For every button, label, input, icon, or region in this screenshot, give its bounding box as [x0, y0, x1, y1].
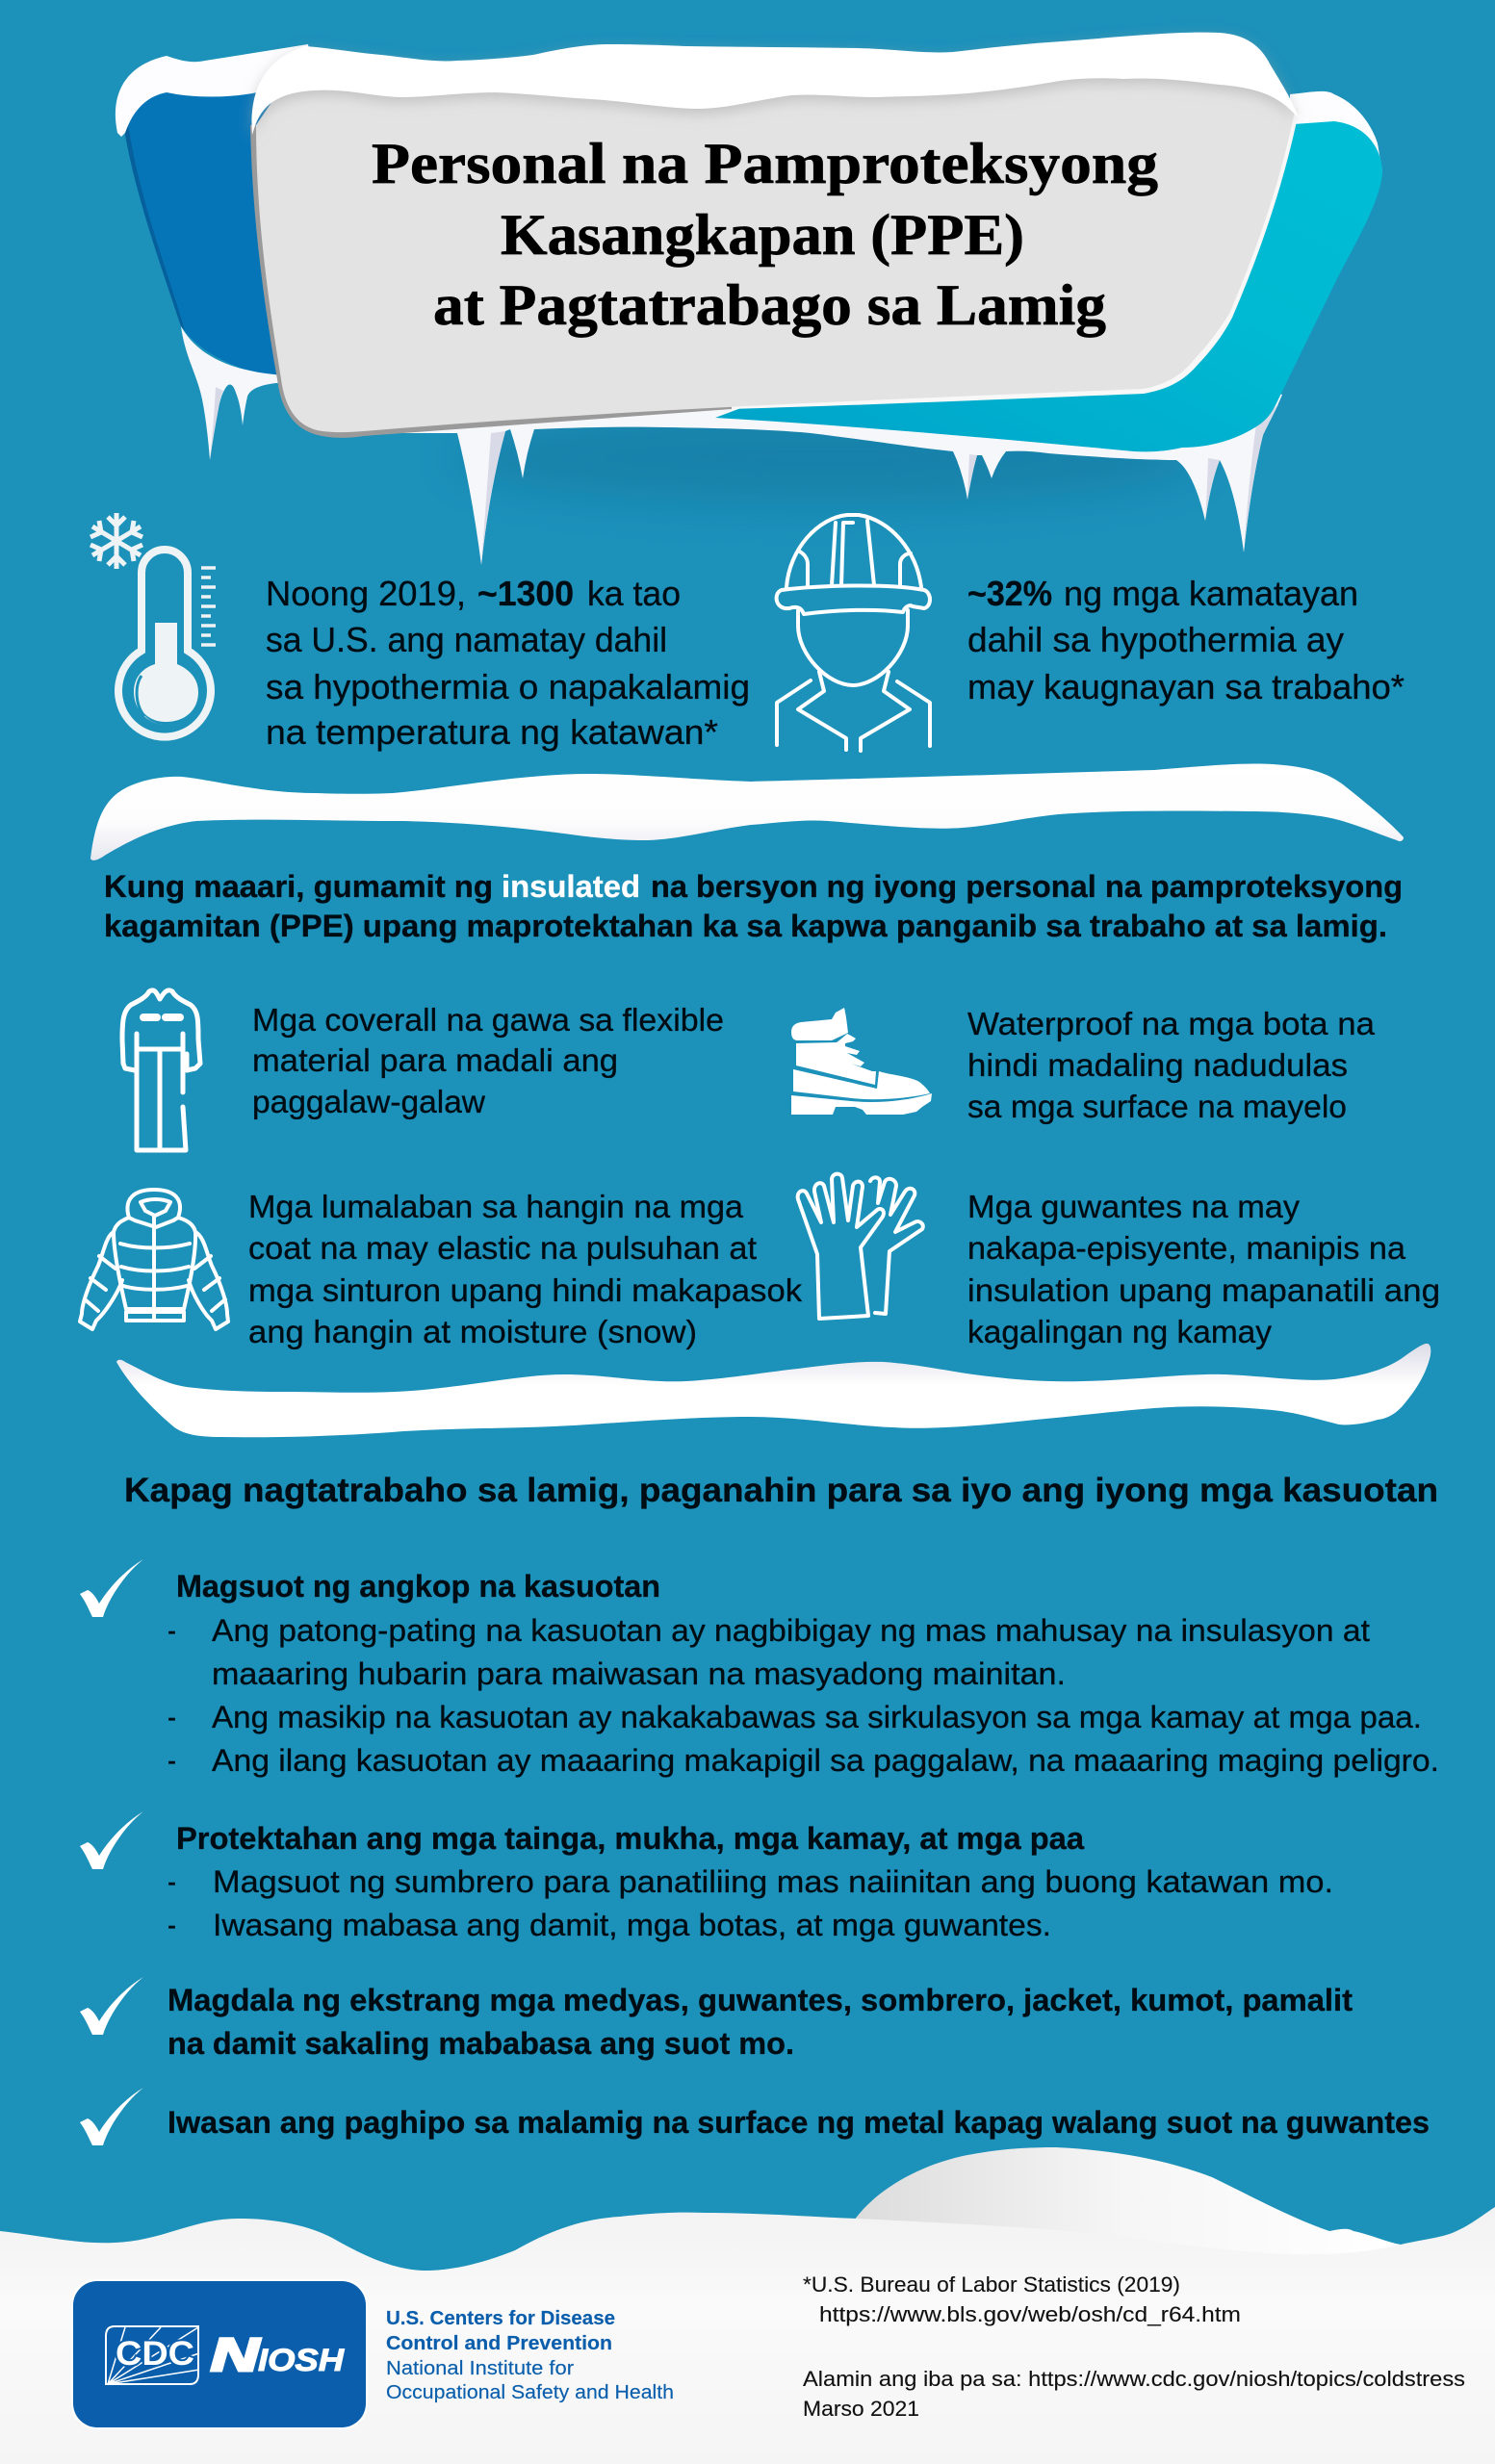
stat: 32 percent: [967, 574, 1405, 706]
footer snow: [0, 2147, 1495, 2464]
back snow hill: [852, 2147, 1401, 2310]
grey sign card: [250, 58, 1300, 438]
stat: 1300 deaths: Noong 2019,: [266, 574, 466, 613]
icon: worker with hard hat: [777, 515, 930, 751]
front snow: [0, 2207, 1495, 2464]
icon: gloves: [798, 1174, 923, 1319]
title text: Personal na Pamproteksyong: [372, 132, 1158, 195]
stat: 32 percent: may kaugnayan sa trabaho*: [967, 667, 1405, 706]
references: *U.S. Bureau of Labor Statistics (2019): [803, 2272, 1180, 2297]
heading: make clothing work for you: Kapag nagtatrabaho sa lamig, paganahin para sa iyo ang iyong mga kasuotan: [124, 1472, 1438, 1509]
tip bullets: Magsuot ng sumbrero para panatiliing mas naiinitan ang buong katawan mo.: [213, 1864, 1333, 1899]
snow divider: [90, 763, 1404, 860]
sign dark edge: [250, 125, 732, 438]
references: https://www.bls.gov/web/osh/cd_r64.htm: [819, 2302, 1241, 2326]
text: coverall: [252, 1002, 724, 1119]
organisation name: Control and Prevention: [386, 2333, 612, 2354]
tip bullets: -: [168, 1700, 176, 1734]
references: [803, 2272, 1465, 2421]
title text: at Pagtatrabago sa Lamig: [433, 273, 1106, 337]
tip bullets: [168, 1613, 1439, 1778]
logo: CDC NIOSH: [71, 2279, 368, 2429]
tip: bring extras: [80, 1977, 1353, 2061]
organisation name: Occupational Safety and Health: [386, 2382, 674, 2403]
text: coverall: paggalaw-galaw: [252, 1084, 485, 1119]
text: boot: hindi madaling nadudulas: [967, 1047, 1348, 1083]
text: boot: [967, 1006, 1376, 1124]
stat: 1300 deaths: ka tao: [587, 574, 681, 613]
insulated PPE advice: insulated: [502, 869, 640, 904]
tip: protect ears, face, hands, feet: [80, 1811, 1333, 1942]
title text: Kasangkapan (PPE): [501, 203, 1024, 267]
text: gloves: [967, 1189, 1440, 1349]
icon: check: [80, 1811, 143, 1869]
tip bullets: -: [168, 1864, 176, 1899]
icon: snowflake: [90, 513, 142, 569]
icon: check: [80, 2088, 143, 2145]
organisation name: [386, 2308, 674, 2403]
CDC mark: [106, 2326, 199, 2384]
tip bullets: Ang ilang kasuotan ay maaaring makapigil sa paggalaw, na maaaring maging peligro.: [212, 1743, 1439, 1778]
text: boot: sa mga surface na mayelo: [967, 1089, 1347, 1124]
snow shelf and icicles: [347, 385, 1282, 565]
tip bullets: -: [168, 1613, 176, 1648]
text: coverall: material para madali ang: [252, 1042, 618, 1078]
text: gloves: Mga guwantes na may: [967, 1189, 1301, 1224]
insulated PPE advice: na bersyon ng iyong personal na pamproteksyong: [651, 869, 1403, 904]
text: jacket: [248, 1189, 803, 1349]
stat: 1300 deaths: sa hypothermia o napakalamig: [266, 667, 750, 706]
tip text: Magdala ng ekstrang mga medyas, guwantes, sombrero, jacket, kumot, pamalit: [168, 1983, 1353, 2017]
tip bullets: [168, 1864, 1333, 1942]
organisation name: U.S. Centers for Disease: [386, 2308, 615, 2329]
blue back card: [116, 44, 318, 460]
insulated PPE advice: [104, 869, 1403, 943]
tip: avoid cold metal: [80, 2088, 1430, 2145]
teal back card: [347, 91, 1382, 565]
icon: jacket: [80, 1190, 228, 1329]
thermometer fill: [134, 623, 198, 725]
text: gloves: nakapa-episyente, manipis na: [967, 1230, 1406, 1266]
sign face: [256, 58, 1295, 432]
references: Marso 2021: [803, 2397, 919, 2421]
tip bullets: -: [168, 1743, 176, 1778]
tip text: na damit sakaling mababasa ang suot mo.: [168, 2026, 794, 2061]
banner shadow: [452, 411, 1203, 503]
icon: check: [80, 1559, 143, 1617]
stat: 32 percent: dahil sa hypothermia ay: [967, 620, 1344, 659]
text: jacket: mga sinturon upang hindi makapasok: [248, 1272, 803, 1308]
NIOSH mark: [211, 2330, 345, 2381]
text: gloves: kagalingan ng kamay: [967, 1314, 1273, 1349]
text: boot: Waterproof na mga bota na: [967, 1006, 1376, 1041]
organisation name: National Institute for: [386, 2358, 574, 2379]
tip bullets: Iwasang mabasa ang damit, mga botas, at mga guwantes.: [213, 1908, 1051, 1942]
tip heading: Protektahan ang mga tainga, mukha, mga kamay, at mga paa: [176, 1821, 1085, 1856]
icon: check: [80, 1977, 143, 2035]
text: jacket: ang hangin at moisture (snow): [248, 1314, 697, 1349]
stat: 32 percent: ng mga kamatayan: [1064, 574, 1358, 613]
stat: 32 percent: ~32%: [967, 574, 1052, 613]
stat: 1300 deaths: na temperatura ng katawan*: [266, 712, 718, 752]
tip text: [168, 1983, 1353, 2061]
text: gloves: insulation upang mapanatili ang: [967, 1272, 1440, 1308]
text: jacket: coat na may elastic na pulsuhan at: [248, 1230, 757, 1266]
stat: 1300 deaths: [266, 574, 750, 752]
thermometer outline: [118, 550, 211, 737]
insulated PPE advice: Kung maaari, gumamit ng: [104, 869, 493, 904]
icon: thermometer with snowflake: [90, 513, 216, 737]
title text: [372, 132, 1158, 337]
NIOSH mark: IOSH: [258, 2343, 345, 2377]
references: Alamin ang iba pa sa: https://www.cdc.gov/niosh/topics/coldstress: [803, 2367, 1465, 2391]
tip heading: Magsuot ng angkop na kasuotan: [176, 1569, 660, 1604]
tip bullets: Ang masikip na kasuotan ay nakakabawas sa sirkulasyon sa mga kamay at mga paa.: [212, 1700, 1422, 1734]
icon: boot: [791, 1008, 932, 1115]
NIOSH mark: N: [211, 2330, 261, 2381]
sign white rim: [732, 96, 1300, 409]
stat: 1300 deaths: sa U.S. ang namatay dahil: [266, 620, 667, 659]
stat: 1300 deaths: ~1300: [477, 574, 574, 613]
tip bullets: Ang patong-pating na kasuotan ay nagbibigay ng mas mahusay na insulasyon at: [212, 1613, 1370, 1648]
snow on sign: [251, 33, 1299, 135]
CDC mark: CDC: [116, 2335, 194, 2373]
insulated PPE advice: kagamitan (PPE) upang maprotektahan ka sa kapwa panganib sa trabaho at sa lamig.: [104, 909, 1387, 943]
text: coverall: Mga coverall na gawa sa flexible: [252, 1002, 724, 1038]
tip: proper clothing: [80, 1559, 1439, 1778]
text: jacket: Mga lumalaban sa hangin na mga: [248, 1189, 744, 1224]
tip bullets: -: [168, 1908, 176, 1942]
icon: coverall: [122, 990, 200, 1150]
tip bullets: maaaring hubarin para maiwasan na masyadong mainitan.: [212, 1656, 1066, 1691]
title banner: [116, 33, 1382, 565]
thermometer scale: [201, 568, 216, 645]
snow divider: [116, 1344, 1431, 1437]
tip text: Iwasan ang paghipo sa malamig na surface ng metal kapag walang suot na guwantes: [168, 2105, 1430, 2140]
